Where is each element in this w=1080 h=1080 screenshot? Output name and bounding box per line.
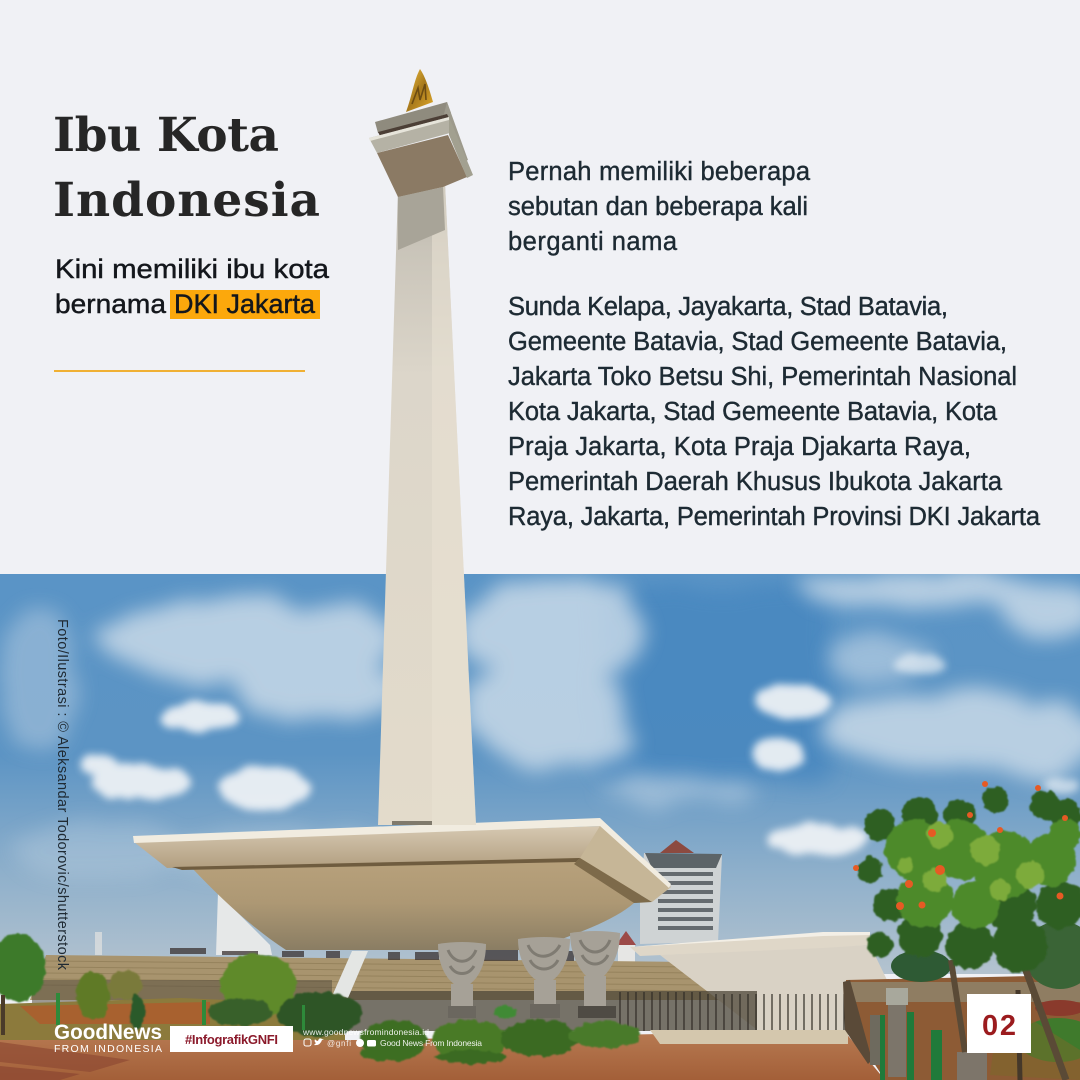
title: Indonesia xyxy=(53,173,320,228)
icon: facebook xyxy=(356,1039,364,1047)
flowering tree xyxy=(853,781,1080,973)
intro text: berganti nama xyxy=(508,228,678,256)
icon: twitter xyxy=(314,1038,324,1045)
tower cap xyxy=(369,102,473,250)
bowl underside xyxy=(192,856,652,950)
front lip xyxy=(134,826,642,868)
page number badge xyxy=(967,994,1031,1053)
golden flame xyxy=(406,69,433,112)
hashtag badge: #InfografikGNFI xyxy=(185,1032,278,1047)
logo: GoodNews from Indonesia xyxy=(54,1021,162,1055)
list of former names: Pemerintah Daerah Khusus Ibukota Jakarta xyxy=(508,468,1003,496)
intro text xyxy=(508,158,811,256)
left tree trunk xyxy=(1,995,5,1035)
distant tall building xyxy=(640,840,722,944)
subtitle with highlight: bernama xyxy=(55,289,167,319)
small red roof pavilion xyxy=(616,931,636,963)
list of former names: Sunda Kelapa, Jayakarta, Stad Batavia, xyxy=(508,293,948,321)
website and social handles: www.goodnewsfromindonesia.id xyxy=(302,1027,429,1037)
right white terrace wall xyxy=(630,932,887,1032)
top face xyxy=(133,818,671,888)
list of former names: Gemeente Batavia, Stad Gemeente Batavia, xyxy=(508,328,1007,356)
intro text: sebutan dan beberapa kali xyxy=(508,193,808,221)
website and social handles: Good News From Indonesia xyxy=(380,1038,482,1048)
tree trunks xyxy=(951,960,1066,1080)
monas tower shaft xyxy=(378,183,476,825)
photo credit: Foto/Ilustrasi : © Aleksandar Todorovic/shutterstock xyxy=(54,619,70,971)
green bollards xyxy=(56,993,305,1030)
distant white tower xyxy=(216,892,272,955)
list of former names xyxy=(508,293,1041,531)
intro text: Pernah memiliki beberapa xyxy=(508,158,811,186)
website and social handles xyxy=(302,1027,482,1048)
list of former names: Praja Jakarta, Kota Praja Djakarta Raya, xyxy=(508,433,971,461)
stone and green posts xyxy=(870,988,987,1080)
logo: GoodNews from Indonesia: FROM INDONESIA xyxy=(54,1043,162,1055)
crowd on the terrace xyxy=(95,932,574,961)
list of former names: Kota Jakarta, Stad Gemeente Batavia, Kota xyxy=(508,398,998,426)
title: Ibu Kota xyxy=(53,108,279,163)
highlight: DKI Jakarta: DKI Jakarta xyxy=(174,289,316,319)
icon: youtube xyxy=(367,1040,376,1046)
icon: instagram xyxy=(304,1039,311,1046)
white staircase railing xyxy=(333,951,368,998)
list of former names: Jakarta Toko Betsu Shi, Pemerintah Nasional xyxy=(508,363,1017,391)
right side lip xyxy=(580,826,671,902)
fence xyxy=(32,980,844,1031)
ground and paving xyxy=(0,998,885,1080)
stone urns xyxy=(438,931,620,1018)
photo: sky with clouds xyxy=(0,572,1080,974)
title xyxy=(53,108,320,228)
right side ground xyxy=(843,921,1080,1080)
page number badge: 02 xyxy=(982,1010,1016,1042)
divider line xyxy=(54,370,305,372)
website and social handles: @gnfi xyxy=(327,1039,351,1048)
hashtag badge xyxy=(170,1026,293,1052)
left shrubs xyxy=(0,934,362,1036)
monument steps xyxy=(30,955,730,1000)
monument platform xyxy=(133,818,671,950)
subtitle with highlight xyxy=(55,254,330,319)
subtitle with highlight: Kini memiliki ibu kota xyxy=(55,254,330,284)
hedges xyxy=(360,1005,641,1064)
logo: GoodNews from Indonesia: GoodNews xyxy=(54,1021,162,1044)
list of former names: Raya, Jakarta, Pemerintah Provinsi DKI Jakarta xyxy=(508,503,1041,531)
